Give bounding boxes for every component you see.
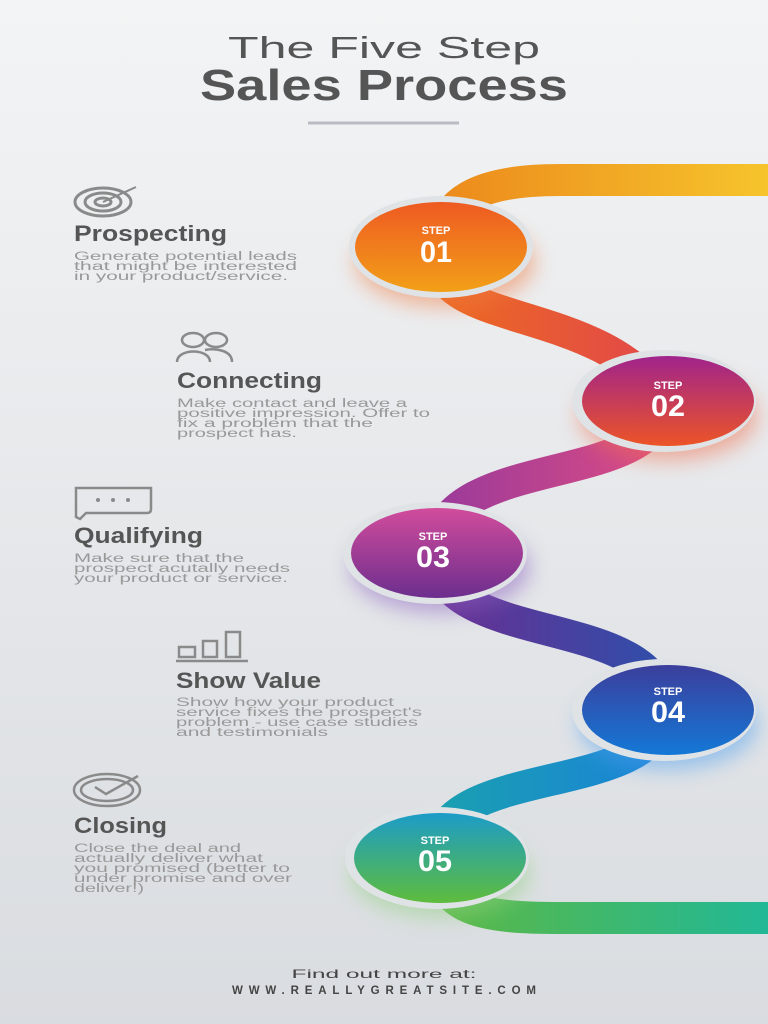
title: Sales Process: [200, 61, 568, 110]
panel: qualifying: prospect acutally needs: [74, 563, 290, 575]
panel: prospecting: Prospecting: [74, 221, 227, 246]
panel: qualifying: [74, 488, 290, 585]
panel: closing: deliver!): [74, 883, 144, 895]
panel: qualifying: Make sure that the: [74, 553, 244, 565]
title: The Five Step: [228, 30, 540, 65]
panel: closing: [74, 774, 292, 895]
panel: show value: Show how your product: [176, 697, 395, 709]
step 03 badge: 03: [416, 541, 450, 574]
step 04 badge: STEP: [654, 686, 682, 698]
panel: prospecting: [74, 187, 297, 283]
panel: connecting: fix a problem that the: [177, 418, 373, 430]
icon: check circle: [74, 774, 140, 806]
step 01 badge: [349, 196, 535, 307]
panel: closing: Close the deal and: [74, 843, 241, 855]
step 01 badge: 01: [420, 236, 452, 269]
step 01 badge: STEP: [422, 225, 450, 237]
panel: connecting: Make contact and leave a: [177, 398, 408, 410]
panel: closing: you promised (better to: [74, 863, 290, 875]
panel: prospecting: that might be interested: [74, 261, 297, 273]
step 02 badge: [572, 350, 758, 461]
panel: prospecting: Generate potential leads: [74, 251, 297, 263]
step 03 badge: STEP: [419, 531, 447, 543]
title: [200, 30, 568, 110]
panel: closing: actually deliver what: [74, 853, 264, 865]
step 02 badge: STEP: [654, 380, 682, 392]
panel: show value: service fixes the prospect's: [176, 707, 422, 719]
step 05 badge: 05: [418, 845, 452, 878]
panel: show value: [176, 632, 422, 739]
icon: bars: [176, 632, 248, 661]
step 05 badge: STEP: [421, 835, 449, 847]
panel: connecting: [177, 333, 430, 440]
ribbon path: [435, 180, 768, 918]
step 04 badge: 04: [651, 696, 685, 729]
footer: WWW.REALLYGREATSITE.COM: [232, 985, 536, 997]
panel: closing: Closing: [74, 813, 167, 838]
footer: Find out more at:: [292, 967, 476, 981]
step 03 badge: [343, 502, 530, 613]
panel: show value: problem - use case studies: [176, 717, 418, 729]
panel: qualifying: your product or service.: [74, 573, 288, 585]
icon: chat bubble: [76, 488, 151, 519]
step 04 badge: [572, 659, 758, 770]
step 05 badge: [345, 807, 530, 918]
panel: closing: under promise and over: [74, 873, 292, 885]
panel: show value: and testimonials: [176, 727, 328, 739]
panel: connecting: Connecting: [177, 368, 322, 393]
icon: target: [75, 187, 136, 216]
step 02 badge: 02: [651, 390, 685, 423]
footer: [232, 967, 536, 997]
panel: show value: Show Value: [176, 668, 321, 693]
panel: qualifying: Qualifying: [74, 523, 203, 548]
panel: connecting: prospect has.: [177, 428, 297, 440]
icon: people: [177, 333, 232, 362]
panel: connecting: positive impression. Offer to: [177, 408, 430, 420]
panel: prospecting: in your product/service.: [74, 271, 288, 283]
